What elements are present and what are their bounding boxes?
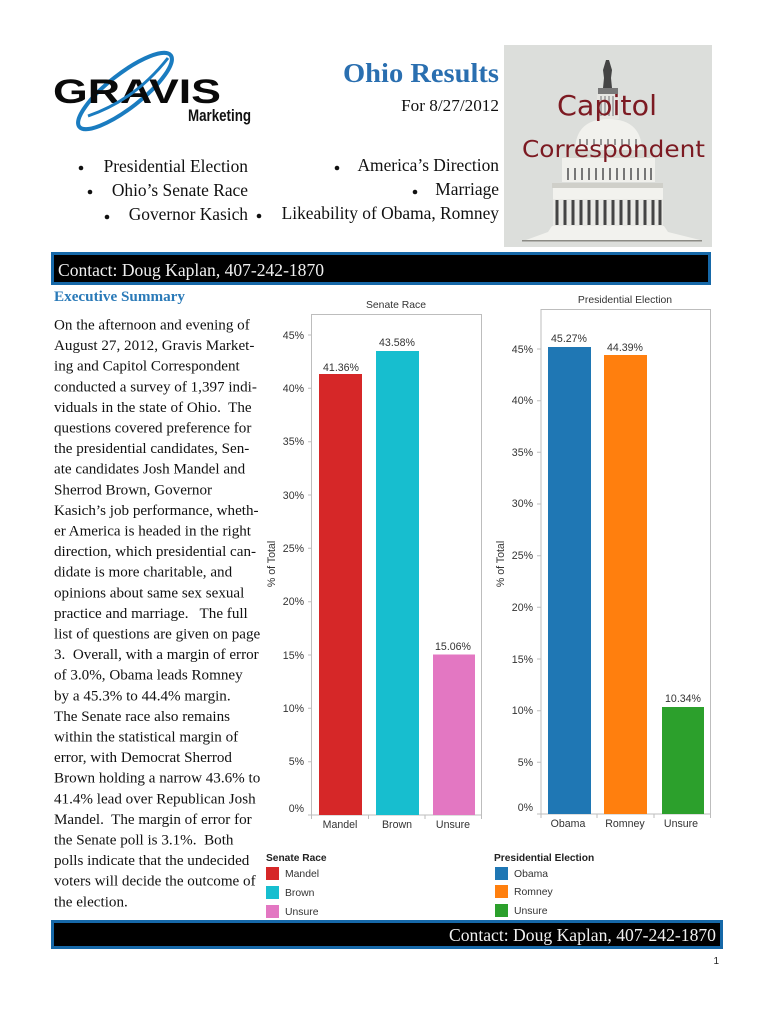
- legend: Senate Race: Senate Race: [266, 853, 327, 864]
- logo: Gravis Marketing: [53, 42, 251, 140]
- y axis ticks: 25%: [512, 550, 534, 562]
- legend: Senate Race: [266, 853, 327, 918]
- legend: Presidential Election: Presidential Election: [494, 853, 594, 864]
- bar: Brown: Brown: [382, 819, 412, 831]
- contact bar: bottom: [52, 922, 722, 948]
- bar: Brown: [376, 337, 419, 831]
- y axis ticks: 20%: [283, 596, 305, 608]
- icon: capitol dome: [522, 60, 702, 242]
- text block: executive summary: questions covered preference for: [54, 420, 251, 436]
- legend: Presidential Election: Unsure: [514, 906, 548, 917]
- text block: executive summary: The Senate race also remains: [54, 709, 230, 725]
- y axis ticks: 30%: [512, 498, 534, 510]
- chart title: Presidential Election: [578, 295, 672, 306]
- text block: executive summary: voters will decide the outcome of: [54, 874, 257, 890]
- logo wordmark: Capitol: [557, 89, 657, 122]
- date: For 8/27/2012: [401, 96, 499, 115]
- bar chart: Presidential Election: [495, 295, 710, 830]
- title: Ohio Results: [343, 57, 499, 88]
- text block: executive summary: practice and marriage. The full: [54, 606, 248, 622]
- bullet list: right: Likeability of Obama, Romney: [282, 203, 499, 223]
- y axis ticks: 45%: [512, 344, 534, 356]
- text block: executive summary: the presidential candidates, Sen-: [54, 441, 249, 457]
- bar: Brown: 43.58%: [379, 337, 416, 349]
- contact bar: top: Contact: Doug Kaplan, 407-242-1870: [58, 260, 324, 280]
- y axis ticks: 20%: [512, 602, 534, 614]
- text block: executive summary: Kasich’s job performance, wheth-: [54, 503, 259, 519]
- text block: executive summary: polls indicate that the undecided: [54, 853, 250, 869]
- bar: Unsure: Unsure: [664, 818, 698, 830]
- text block: executive summary: error, with Democrat Sherrod: [54, 750, 232, 766]
- chart title: Senate Race: [366, 300, 426, 311]
- y axis ticks: 10%: [283, 703, 305, 715]
- text block: executive summary: viduals in the state of Ohio. The: [54, 400, 252, 416]
- y axis label: % of Total: [495, 541, 507, 587]
- heading: Executive Summary: Executive Summary: [54, 289, 186, 305]
- bar: Mandel: Mandel: [323, 819, 357, 831]
- text block: executive summary: Mandel. The margin of error for: [54, 812, 252, 828]
- text block: executive summary: the election.: [54, 894, 128, 910]
- bar: Unsure: Unsure: [436, 819, 470, 831]
- bar: Romney: [604, 342, 647, 830]
- text block: executive summary: direction, which presidential can-: [54, 544, 256, 560]
- text block: executive summary: by a 45.3% to 44.4% margin.: [54, 688, 231, 704]
- text block: executive summary: of 3.0%, Obama leads Romney: [54, 668, 243, 684]
- y axis ticks: 15%: [283, 650, 305, 662]
- text block: executive summary: er America is headed in the right: [54, 524, 252, 540]
- text block: executive summary: the Senate poll is 3.1%. Both: [54, 832, 234, 848]
- y axis ticks: 35%: [283, 436, 305, 448]
- bar chart: Senate Race: [266, 300, 482, 831]
- bar: Mandel: [319, 362, 362, 831]
- y axis ticks: 5%: [289, 756, 305, 768]
- text block: executive summary: 3. Overall, with a margin of error: [54, 647, 259, 663]
- text block: executive summary: ing and Capitol Correspondent: [54, 359, 241, 375]
- bar: Romney: Romney: [605, 818, 645, 830]
- logo wordmark: [522, 89, 705, 163]
- legend: Presidential Election: Romney: [514, 887, 553, 898]
- bullet list: left: Governor Kasich: [129, 204, 248, 224]
- legend: Presidential Election: [494, 853, 594, 917]
- bullet list: right: America’s Direction: [358, 155, 499, 175]
- text block: executive summary: On the afternoon and evening of: [54, 318, 251, 334]
- logo wordmark: Correspondent: [522, 137, 705, 163]
- y axis ticks: 25%: [283, 543, 305, 555]
- y axis ticks: 40%: [512, 395, 534, 407]
- y axis ticks: 45%: [283, 330, 305, 342]
- y axis ticks: 10%: [512, 705, 534, 717]
- text block: executive summary: ate candidates Josh Mandel and: [54, 462, 246, 478]
- bullet list: right: Marriage: [435, 179, 499, 199]
- bullet list: right: [257, 155, 499, 223]
- text block: executive summary: didate is more charitable, and: [54, 565, 233, 581]
- text block: executive summary: conducted a survey of 1,397 indi-: [54, 379, 257, 395]
- y axis ticks: 5%: [518, 757, 534, 769]
- y axis ticks: 40%: [283, 383, 305, 395]
- page number: 1: [713, 956, 719, 967]
- bar: Obama: [548, 333, 591, 830]
- bar: Unsure: [433, 641, 475, 831]
- text block: executive summary: 41.4% lead over Republican Josh: [54, 791, 256, 807]
- text block: executive summary: August 27, 2012, Gravis Market-: [54, 338, 254, 354]
- bar: Unsure: [662, 693, 704, 830]
- bar: Obama: Obama: [551, 818, 585, 830]
- text block: executive summary: opinions about same sex sexual: [54, 585, 244, 601]
- bullet list: left: Ohio’s Senate Race: [112, 180, 248, 200]
- text block: executive summary: [54, 318, 261, 910]
- legend: Senate Race: Unsure: [285, 907, 319, 918]
- logo: Gravis Marketing: Marketing: [188, 106, 251, 125]
- y axis ticks: 35%: [512, 447, 534, 459]
- bar: Unsure: 10.34%: [665, 693, 702, 705]
- y axis ticks: 0%: [518, 802, 534, 814]
- legend: Presidential Election: Obama: [514, 869, 548, 880]
- legend: Senate Race: Mandel: [285, 869, 319, 880]
- bar: Mandel: 41.36%: [323, 362, 360, 374]
- y axis label: % of Total: [266, 541, 278, 587]
- text block: executive summary: within the statistical margin of: [54, 730, 239, 746]
- y axis ticks: 30%: [283, 490, 305, 502]
- logo: Gravis Marketing: GRAVIS: [53, 73, 221, 111]
- bullet list: left: Presidential Election: [104, 156, 248, 176]
- bar: Romney: 44.39%: [607, 342, 644, 354]
- contact bar: bottom: Contact: Doug Kaplan, 407-242-1870: [449, 925, 716, 945]
- bullet list: left: [79, 156, 248, 224]
- text block: executive summary: list of questions are given on page: [54, 626, 261, 642]
- y axis ticks: 15%: [512, 654, 534, 666]
- y axis ticks: [512, 344, 541, 814]
- text block: executive summary: Brown holding a narrow 43.6% to: [54, 771, 260, 787]
- legend: Senate Race: Brown: [285, 888, 315, 899]
- bar: Unsure: 15.06%: [435, 641, 472, 653]
- y axis ticks: 0%: [289, 803, 305, 815]
- bar: Obama: 45.27%: [551, 333, 588, 345]
- panel: Capitol Correspondent logo: [504, 45, 712, 247]
- contact bar: top: [52, 254, 710, 284]
- text block: executive summary: Sherrod Brown, Governor: [54, 482, 212, 498]
- y axis ticks: [283, 330, 312, 815]
